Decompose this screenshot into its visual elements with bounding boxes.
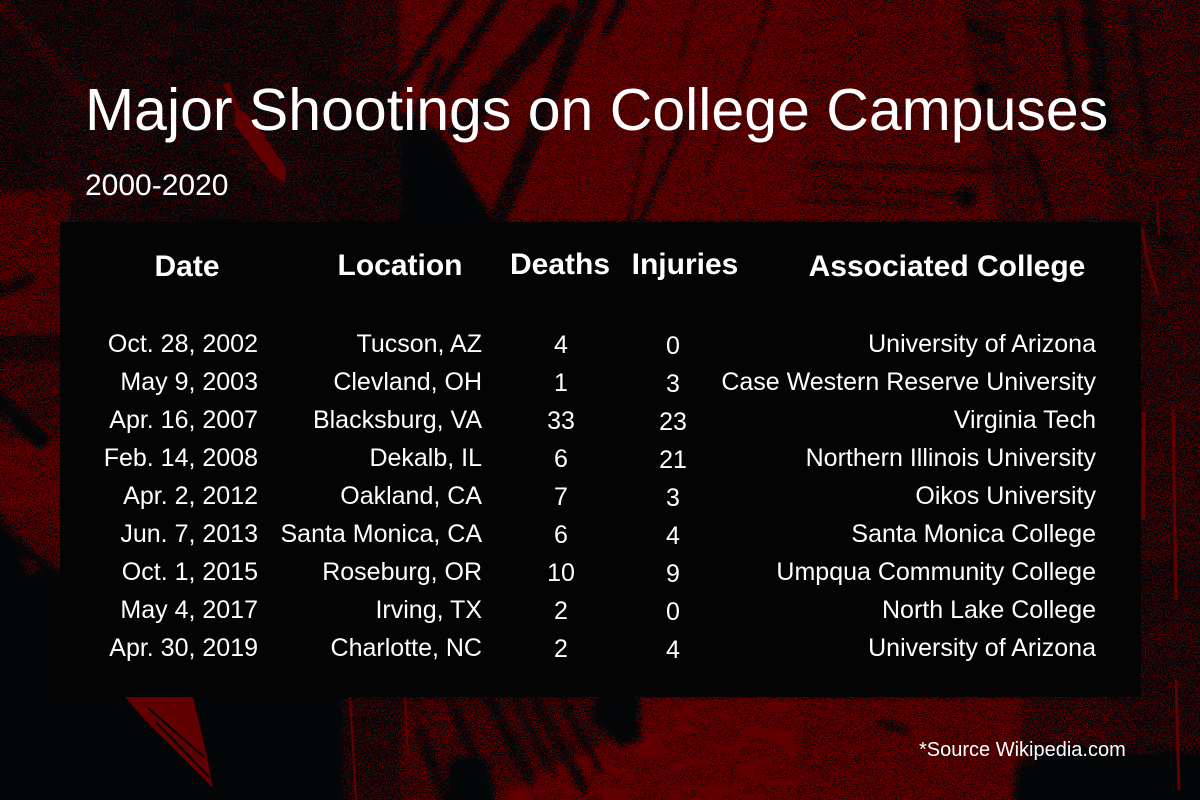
date column: Jun. 7, 2013 [120,520,258,548]
deaths column: 2 [554,635,568,663]
top dense area [400,0,1000,222]
subtitle: 2000-2020 [85,169,228,202]
red wedge [125,697,213,788]
location column: Tucson, AZ [356,330,482,358]
deaths column: 10 [547,559,575,587]
table header: Deaths [510,248,610,281]
injuries column: 0 [666,598,680,626]
injuries column: 9 [666,560,680,588]
location column: Charlotte, NC [331,634,482,662]
deaths column: 6 [554,445,568,473]
date column: Feb. 14, 2008 [104,444,258,472]
date column: Oct. 1, 2015 [122,558,258,586]
left band [0,190,70,335]
associated college column: Case Western Reserve University [721,368,1096,396]
associated college column: North Lake College [882,596,1096,624]
dark brush strokes [400,0,1170,800]
date column: Apr. 16, 2007 [109,406,258,434]
location column: Irving, TX [375,596,482,624]
date column: Apr. 2, 2012 [123,482,258,510]
location column: Oakland, CA [340,482,482,510]
injuries column: 23 [659,408,687,436]
deaths column: 1 [554,369,568,397]
injuries column: 3 [666,484,680,512]
table header: Injuries [632,248,738,281]
associated college column: Oikos University [915,482,1096,510]
title: Major Shootings on College Campuses [85,77,1108,143]
location column: Roseburg, OR [322,558,482,586]
injuries column: 4 [666,636,680,664]
deaths column: 33 [547,407,575,435]
red brush streak [223,82,286,182]
table header: Associated College [809,250,1085,283]
associated college column: Umpqua Community College [776,558,1096,586]
date column: Oct. 28, 2002 [108,330,258,358]
location column [280,330,482,662]
deaths column: 7 [554,483,568,511]
injuries column [659,332,687,664]
associated college column: University of Arizona [868,634,1096,662]
injuries column: 3 [666,370,680,398]
source note: *Source Wikipedia.com [919,739,1126,761]
injuries column: 4 [666,522,680,550]
right band [1130,200,1200,560]
location column: Dekalb, IL [369,444,482,472]
wedge scratches [148,708,210,778]
location column: Blacksburg, VA [313,406,482,434]
associated college column [721,330,1096,662]
associated college column: University of Arizona [868,330,1096,358]
associated college column: Northern Illinois University [806,444,1096,472]
vertical streaks [350,200,1179,800]
associated college column: Santa Monica College [851,520,1096,548]
associated college column: Virginia Tech [954,406,1096,434]
date column: May 4, 2017 [120,596,258,624]
table header: Date [154,250,220,283]
table header [154,248,1085,283]
date column [104,330,258,662]
date column: May 9, 2003 [120,368,258,396]
bottom area [400,697,640,800]
table header: Location [338,249,462,282]
location column: Clevland, OH [333,368,482,396]
deaths column: 4 [554,331,568,359]
injuries column: 0 [666,332,680,360]
injuries column: 21 [659,446,687,474]
deaths column: 6 [554,521,568,549]
table panel [60,222,1141,697]
deaths column [547,331,575,663]
deaths column: 2 [554,597,568,625]
date column: Apr. 30, 2019 [109,634,258,662]
location column: Santa Monica, CA [280,520,482,548]
